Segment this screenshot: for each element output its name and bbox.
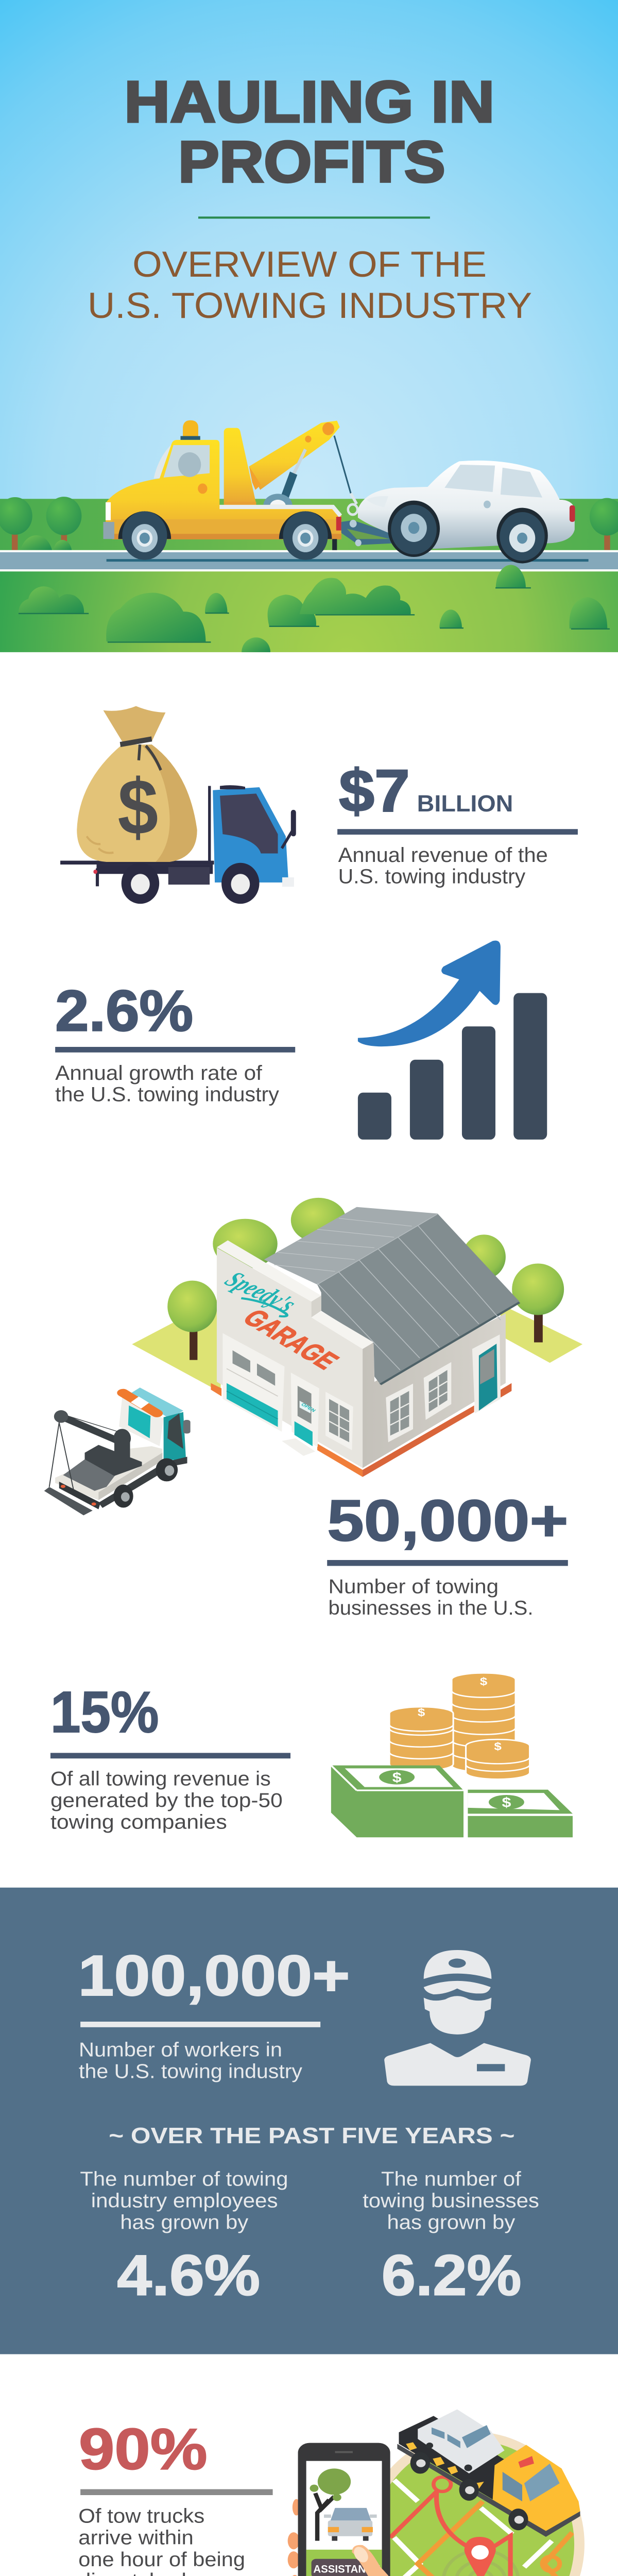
foreground bushes <box>19 565 610 652</box>
stat: $7 billion: $7 <box>339 757 410 824</box>
white car <box>358 461 575 563</box>
stat: 2.6% growth: 2.6% <box>55 979 193 1043</box>
stat: 90%: 90% <box>79 2416 208 2482</box>
heading: over the past five years: ~ OVER THE PAST FIVE YEARS ~ <box>109 2124 514 2148</box>
roadside trees <box>0 497 618 550</box>
stat: $7 billion <box>337 757 578 888</box>
panel: businesses and top-50 stats <box>50 1487 573 1837</box>
stat: 15%: 15% <box>50 1679 159 1745</box>
stat: 50,000+ <box>327 1487 569 1619</box>
illustration: yellow tow truck towing white car <box>104 420 575 563</box>
stat: 90%: arrive within <box>78 2527 194 2549</box>
stat: employees growth 4.6%: industry employees <box>91 2190 278 2212</box>
icon: coins and cash: $ <box>418 1706 425 1719</box>
stat: 2.6% growth: Annual growth rate of <box>55 1062 262 1084</box>
sign: Speedy's Garage <box>218 1267 346 1374</box>
map pin <box>465 2537 496 2576</box>
icon: phone in hand: ASSISTANCE <box>313 2563 381 2575</box>
front door <box>282 1372 319 1456</box>
stat: employees growth 4.6%: 4.6% <box>117 2243 260 2308</box>
stat: $7 billion: BILLION <box>417 791 513 817</box>
green ground <box>0 499 618 652</box>
stat: businesses growth 6.2%: has grown by <box>387 2211 516 2234</box>
stat: 100,000+ workers: 100,000+ <box>78 1943 350 2008</box>
stat: 50,000+: Number of towing <box>328 1575 499 1598</box>
windows <box>325 1362 451 1450</box>
road <box>0 550 618 571</box>
stat: 90%: Of tow trucks <box>78 2505 204 2528</box>
illustration: map with tow truck <box>288 2410 585 2576</box>
panel: hero <box>0 0 618 652</box>
stat: 100,000+ workers: the U.S. towing industry <box>79 2060 302 2083</box>
stat: 2.6% growth <box>55 979 295 1106</box>
sign: Speedy's Garage: Speedy's <box>218 1267 303 1317</box>
stat: 15%: Of all towing revenue is <box>50 1768 271 1790</box>
stat: 50,000+: businesses in the U.S. <box>328 1597 533 1619</box>
garage door <box>222 1333 285 1432</box>
panel: revenue and growth stats <box>55 706 578 1140</box>
icon: coins and cash: $ <box>392 1770 402 1785</box>
subtitle: OVERVIEW OF THE <box>132 245 487 285</box>
icon: isometric tow truck <box>44 1387 191 1515</box>
title <box>124 69 494 195</box>
stat: $7 billion: Annual revenue of the <box>338 844 548 867</box>
stat: employees growth 4.6%: has grown by <box>120 2211 249 2234</box>
trees <box>167 1198 564 1360</box>
stat: 15%: towing companies <box>50 1811 227 1834</box>
stat: 100,000+ workers: Number of workers in <box>79 2039 282 2061</box>
panel: garage illustration <box>44 1198 582 1515</box>
subtitle <box>88 245 532 326</box>
panel: dispatch and top sources heading <box>78 2410 585 2576</box>
title divider <box>198 216 430 218</box>
stat: 90% <box>78 2416 273 2576</box>
towing cable and arm <box>334 436 439 548</box>
flatbed truck with car <box>397 2410 580 2537</box>
stat: businesses growth 6.2% <box>363 2168 539 2308</box>
icon: phone in hand <box>288 2443 408 2576</box>
icon: coins and cash: $ <box>502 1795 511 1810</box>
panel: workforce <box>0 1888 618 2354</box>
chart: rising bars with arrow <box>358 941 547 1140</box>
panel background <box>0 1888 618 2354</box>
side door <box>472 1334 501 1413</box>
stat: 100,000+ workers <box>78 1943 350 2083</box>
icon: money bag on truck: $ <box>117 763 158 851</box>
sign: Speedy's Garage: GARAGE <box>236 1304 346 1374</box>
stat: employees growth 4.6% <box>80 2168 288 2308</box>
stat: 2.6% growth: the U.S. towing industry <box>55 1083 280 1106</box>
icon: coins and cash: $ <box>480 1675 487 1688</box>
subtitle: U.S. TOWING INDUSTRY <box>88 285 532 326</box>
stat: 15% <box>50 1679 290 1834</box>
front door: OPEN <box>300 1402 317 1413</box>
icon: money bag on truck <box>60 706 296 904</box>
icon: coins and cash <box>331 1673 573 1837</box>
stat: businesses growth 6.2%: The number of <box>381 2168 521 2190</box>
stat: businesses growth 6.2%: towing businesses <box>363 2190 539 2212</box>
stat: $7 billion: U.S. towing industry <box>338 865 526 888</box>
icon: worker <box>384 1950 531 2086</box>
stat: 15%: generated by the top-50 <box>50 1789 283 1812</box>
stat: employees growth 4.6%: The number of towing <box>80 2168 288 2190</box>
garage building <box>211 1207 520 1477</box>
title: PROFITS <box>178 129 445 195</box>
stat: businesses growth 6.2%: 6.2% <box>382 2243 521 2308</box>
title: HAULING IN <box>124 69 494 134</box>
lawn <box>132 1298 582 1392</box>
tow truck <box>104 420 341 560</box>
sky background <box>0 0 618 500</box>
icon: coins and cash: $ <box>494 1740 502 1753</box>
stat: 90%: one hour of being <box>78 2548 245 2571</box>
stat: 50,000+: 50,000+ <box>327 1487 569 1553</box>
